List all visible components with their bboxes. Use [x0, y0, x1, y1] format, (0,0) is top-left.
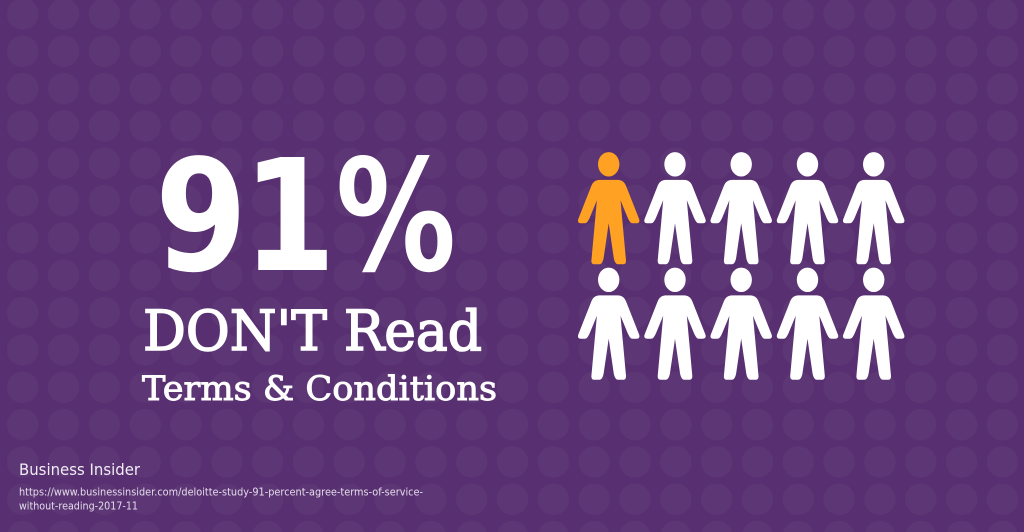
- headline: 91%: %: [336, 126, 456, 307]
- subheading: DON'T Read: DON'T Read: [143, 299, 482, 363]
- subheading: Terms & Conditions: Terms & Conditions: [142, 369, 497, 409]
- pictogram: 10 people, 1 highlighted: [578, 152, 904, 380]
- source URL: without-reading-2017-11: [19, 500, 138, 512]
- source URL: [19, 486, 423, 512]
- person icon: row 2 column 1: [578, 268, 639, 380]
- person icon: row 2 column 3: [710, 268, 772, 380]
- headline: 91%: 9: [155, 127, 247, 308]
- person icon: row 1 column 4: [777, 152, 838, 264]
- person icon: row 2 column 2: [644, 268, 706, 380]
- source URL: https://www.businessinsider.com/deloitte-study-91-percent-agree-terms-of-service-: [19, 486, 423, 498]
- source name: Business Insider: [19, 460, 140, 479]
- headline: 91%: 1: [242, 127, 336, 307]
- person icon: row 1 column 2: [644, 152, 706, 264]
- person icon: row 1 column 5: [843, 152, 904, 264]
- person icon: row 2 column 5: [843, 268, 904, 380]
- headline: 91%: [155, 126, 456, 308]
- person icon: row 1 column 3: [710, 152, 772, 264]
- person icon: highlighted orange: [578, 152, 639, 264]
- person icon: row 2 column 4: [777, 268, 838, 380]
